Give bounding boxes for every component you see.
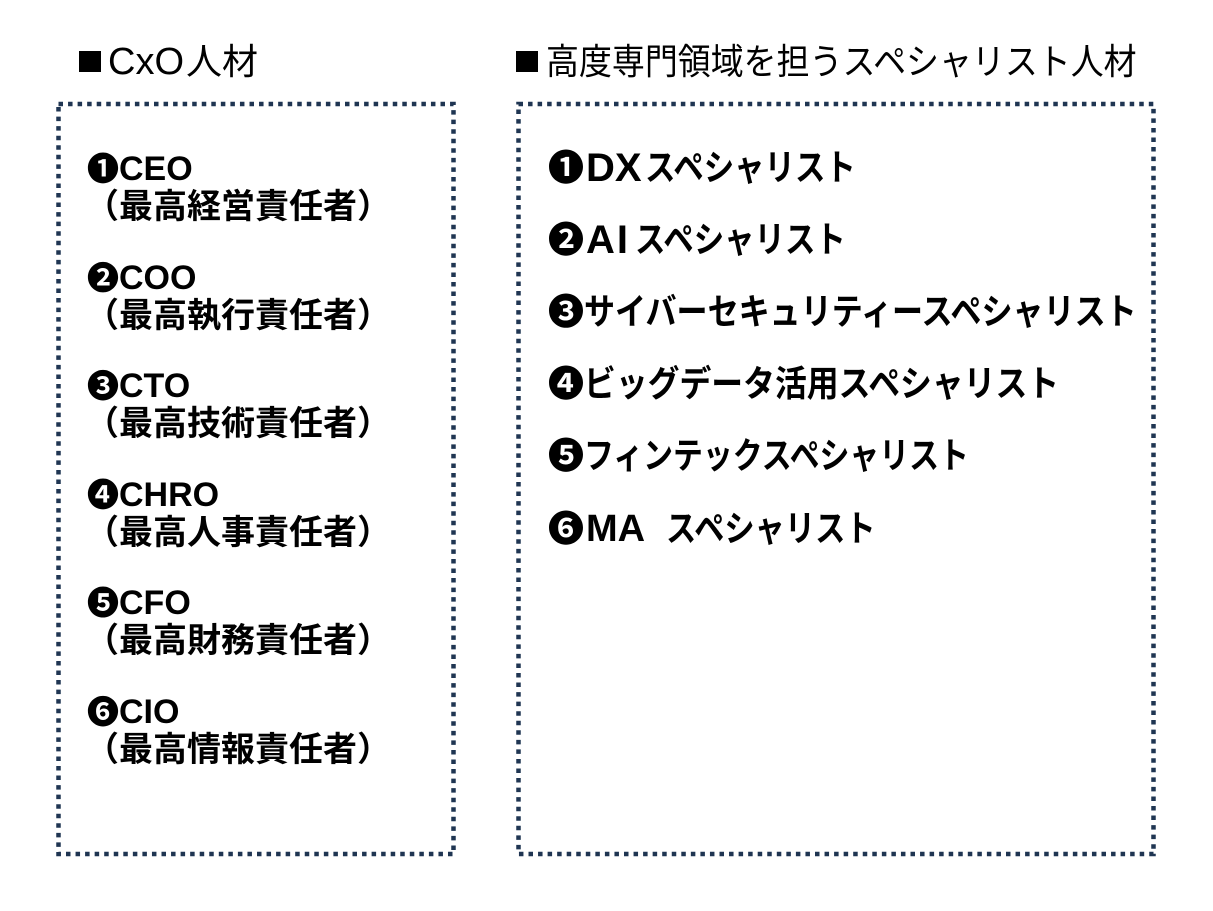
item: CIO <box>85 693 391 769</box>
item: fintech specialist: フィンテックスペシャリスト <box>584 435 969 476</box>
item: CEO: ❶ <box>87 151 119 187</box>
heading: CxO talent <box>79 41 258 83</box>
panel: CxO list <box>85 150 391 769</box>
item: CHRO: CHRO <box>119 476 219 514</box>
item: CHRO: ❹ <box>87 477 119 513</box>
item: CEO <box>85 150 391 226</box>
item: COO: （最高執行責任者） <box>85 297 391 335</box>
item: cybersecurity specialist: サイバーセキュリティースペシャリスト <box>584 291 1137 332</box>
item: CFO <box>85 584 391 660</box>
item: COO: COO <box>119 259 196 297</box>
item: DX specialist: スペシャリスト <box>645 147 856 188</box>
heading bullet <box>516 51 538 72</box>
item: CFO: （最高財務責任者） <box>85 622 391 660</box>
item: big data specialist: ❹ <box>548 363 584 404</box>
heading text kanji: 人材 <box>186 41 258 82</box>
item: AI specialist: スペシャリスト <box>635 219 846 260</box>
item: MA specialist: ❻ <box>548 508 584 549</box>
item: COO <box>85 259 391 335</box>
item: MA specialist: スペシャリスト <box>666 508 876 549</box>
item: CEO: （最高経営責任者） <box>85 188 391 226</box>
item: AI specialist: ❷ <box>548 219 584 260</box>
item: DX specialist <box>548 146 856 190</box>
panel: specialist list <box>548 146 1137 550</box>
item: big data specialist: ビッグデータ活用スペシャリスト <box>584 363 1059 404</box>
item: CTO: CTO <box>119 367 190 405</box>
item: DX specialist: ❶ <box>548 147 584 188</box>
item: CFO: ❺ <box>87 585 119 621</box>
heading text: 高度専門領域を担うスペシャリスト人材 <box>546 41 1137 82</box>
item: CTO: ❸ <box>87 368 119 404</box>
item: AI specialist <box>548 218 846 262</box>
item: fintech specialist: ❺ <box>548 435 584 476</box>
item: COO: ❷ <box>87 260 119 296</box>
item: CHRO: （最高人事責任者） <box>85 514 391 552</box>
item: CTO <box>85 367 391 443</box>
item: cybersecurity specialist: ❸ <box>548 291 584 332</box>
heading: specialist talent <box>516 41 1137 82</box>
item: CIO: CIO <box>119 693 179 731</box>
heading text latin: CxO <box>108 41 184 83</box>
item: AI specialist: AI <box>586 218 630 262</box>
item: CHRO <box>85 476 391 552</box>
item: MA specialist: MA <box>586 508 645 550</box>
heading bullet <box>79 51 101 72</box>
item: CFO: CFO <box>119 584 191 622</box>
item: CEO: CEO <box>119 150 193 188</box>
item: CIO: （最高情報責任者） <box>85 731 391 769</box>
item: MA specialist <box>548 508 876 550</box>
item: CIO: ❻ <box>87 694 119 730</box>
item: CTO: （最高技術責任者） <box>85 405 391 443</box>
item: DX specialist: DX <box>586 146 642 190</box>
